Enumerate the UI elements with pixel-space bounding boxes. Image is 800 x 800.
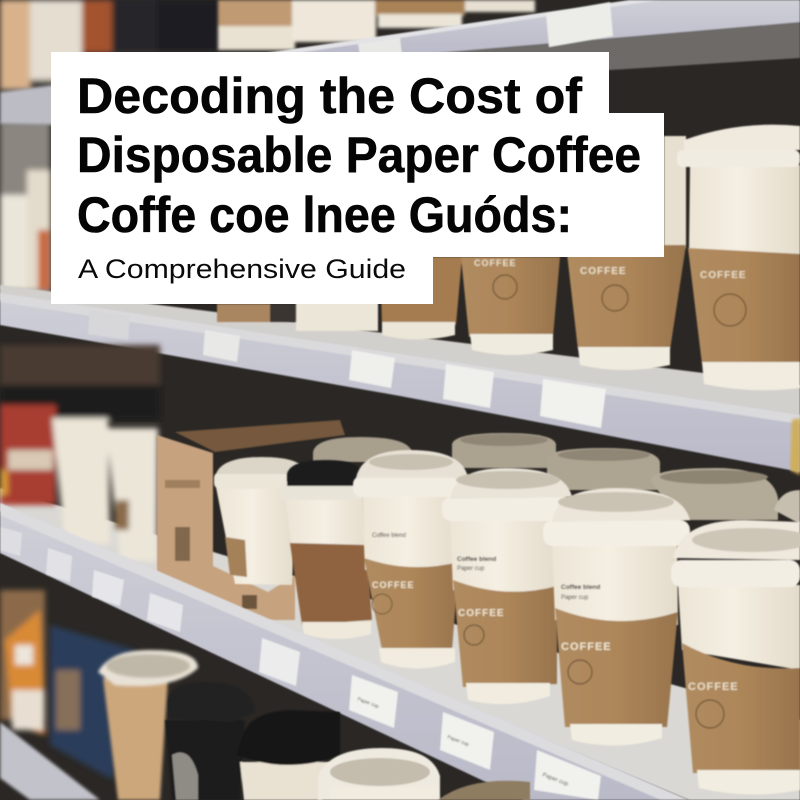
cup: foreground right (671, 520, 800, 795)
shelf 3 rail with price labels: Paper cup (356, 696, 380, 710)
cup: foreground centre left: COFFEE (458, 608, 505, 619)
top row cups (218, 0, 535, 50)
shelf 3 rail with price labels: Paper cup (446, 734, 470, 748)
white title background (51, 52, 664, 304)
cup: foreground left: Coffee blend (372, 533, 406, 539)
blurred products, bottom shelf (0, 590, 135, 780)
blurred left products, middle shelf (0, 345, 160, 562)
heading (77, 68, 641, 243)
subtitle: A Comprehensive Guide (78, 254, 406, 284)
middle shelf rail with price labels (0, 293, 800, 472)
heading: Decoding the Cost of (77, 68, 582, 124)
cup: foreground centre right: Coffee blend (561, 584, 600, 591)
upper row of cups (217, 125, 800, 390)
upper row of cups: COFFEE (700, 270, 747, 281)
shelf 3 rail with price labels: Paper cup (541, 772, 570, 788)
shelf 3 rail with price labels (0, 503, 689, 800)
cup: white lid bottom shelf (318, 748, 530, 800)
bottom left shelf (0, 722, 100, 800)
upper row of cups: COFFEE (474, 258, 517, 268)
heading: Disposable Paper Coffee (77, 127, 641, 183)
third shelf surface (0, 488, 800, 800)
cardboard display box (157, 420, 345, 620)
cup: foreground centre right: Paper cup (561, 595, 589, 601)
cup: foreground left (353, 450, 468, 668)
heading: Coffe coe lnee Guóds: (77, 187, 572, 243)
top shelf rail (265, 0, 800, 70)
blurred products top left (0, 0, 220, 302)
cup: foreground left: COFFEE (372, 580, 415, 590)
cup: black lid with brown sleeve (280, 460, 372, 639)
upper row of cups: COFFEE (580, 266, 627, 277)
cup: foreground centre left: Paper cup (457, 566, 485, 572)
back row lids (313, 433, 800, 524)
title panel (51, 52, 664, 304)
cup: foreground centre left: Coffee blend (457, 556, 496, 563)
cup: cream with small sleeve (214, 457, 306, 585)
cup: foreground centre right: COFFEE (561, 641, 612, 653)
top shelf left rail (0, 84, 60, 125)
cup: tan bottom shelf (98, 650, 198, 800)
cup: foreground right: COFFEE (688, 681, 739, 693)
cup: foreground centre right (543, 488, 690, 746)
middle shelf surface behind cups (0, 285, 800, 420)
cups: black lids bottom shelf (165, 682, 340, 800)
cup: foreground centre left (442, 468, 572, 704)
